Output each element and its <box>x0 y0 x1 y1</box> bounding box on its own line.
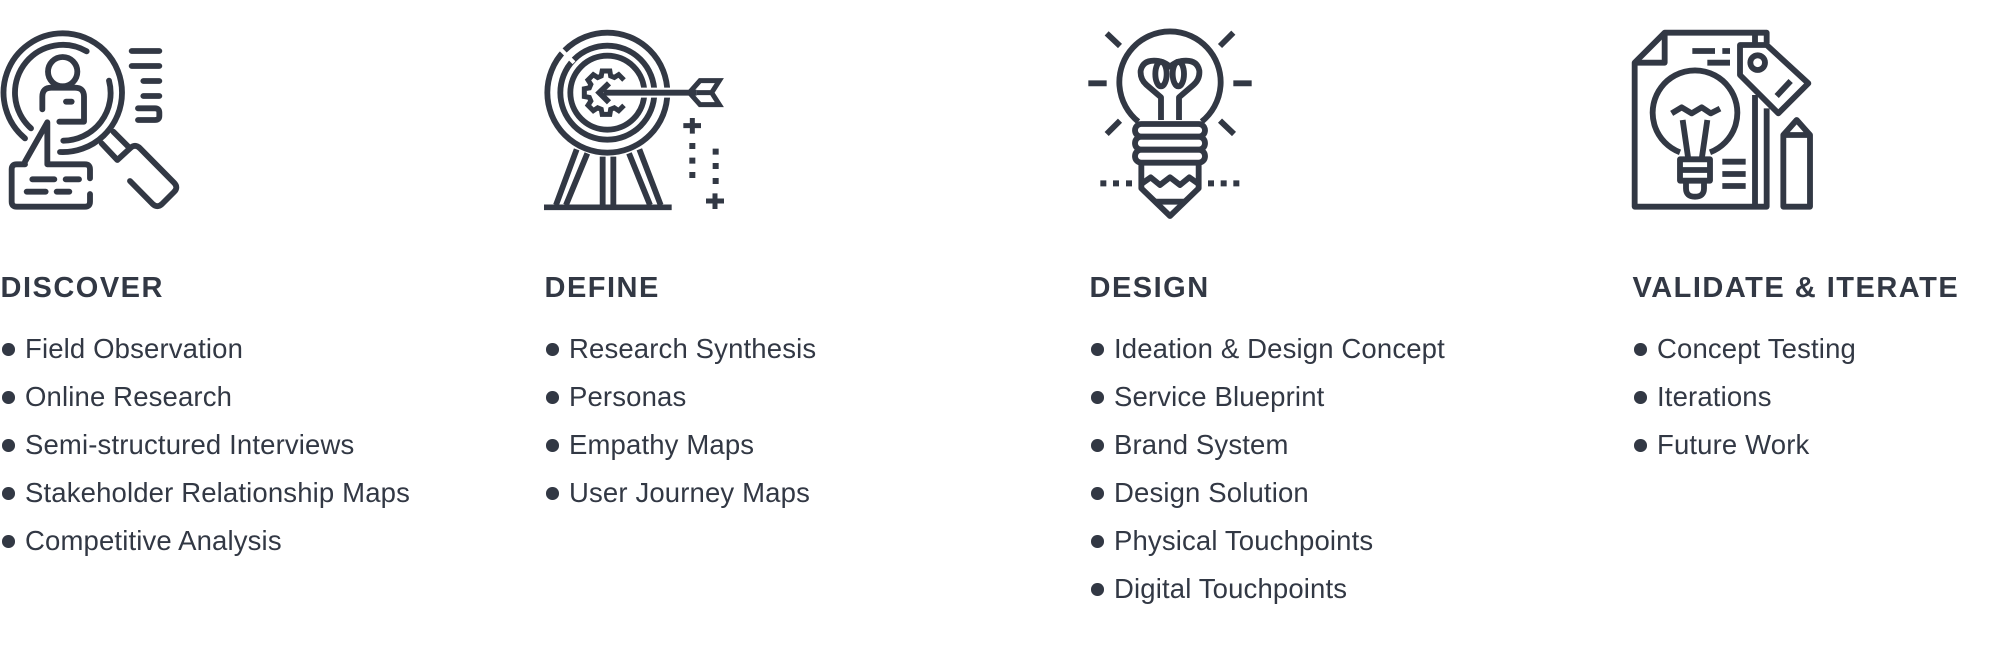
list: define methods: Research Synthesis <box>569 333 816 364</box>
icon: magnifier with person and speech bubble <box>0 30 180 210</box>
icon: target with arrow <box>544 30 724 210</box>
list: design methods: Brand System <box>1114 429 1289 460</box>
icon: document with bulb, tag and pencil <box>1632 30 1813 210</box>
list: discover methods: Field Observation <box>25 333 243 364</box>
list: define methods: User Journey Maps <box>569 477 810 508</box>
list: design methods: Digital Touchpoints <box>1114 573 1347 604</box>
list: define methods: Empathy Maps <box>569 429 754 460</box>
list: define methods: Personas <box>569 381 686 412</box>
heading: validate and iterate: VALIDATE & ITERATE <box>1632 272 1959 304</box>
list: validate methods: Future Work <box>1657 429 1809 460</box>
list: discover methods: Stakeholder Relationship Maps <box>25 477 410 508</box>
list: design methods: Design Solution <box>1114 477 1309 508</box>
list: discover methods: Online Research <box>25 381 232 412</box>
panel: define <box>544 30 816 508</box>
list: discover methods <box>2 333 410 556</box>
list: validate methods: Iterations <box>1657 381 1772 412</box>
heading: define: DEFINE <box>544 272 660 304</box>
icon: light bulb pencil <box>1088 28 1252 219</box>
list: discover methods: Semi-structured Interviews <box>25 429 354 460</box>
list: design methods: Service Blueprint <box>1114 381 1324 412</box>
panel: design <box>1088 28 1445 604</box>
panel: validate and iterate <box>1632 30 1959 460</box>
panel: discover <box>0 30 410 556</box>
list: validate methods: Concept Testing <box>1657 333 1856 364</box>
list: discover methods: Competitive Analysis <box>25 525 282 556</box>
list: design methods: Physical Touchpoints <box>1114 525 1373 556</box>
list: define methods <box>546 333 816 508</box>
heading: discover: DISCOVER <box>0 272 164 304</box>
list: validate methods <box>1634 333 1856 460</box>
heading: design: DESIGN <box>1090 272 1210 304</box>
list: design methods: Ideation & Design Concept <box>1114 333 1445 364</box>
list: design methods <box>1091 333 1445 604</box>
